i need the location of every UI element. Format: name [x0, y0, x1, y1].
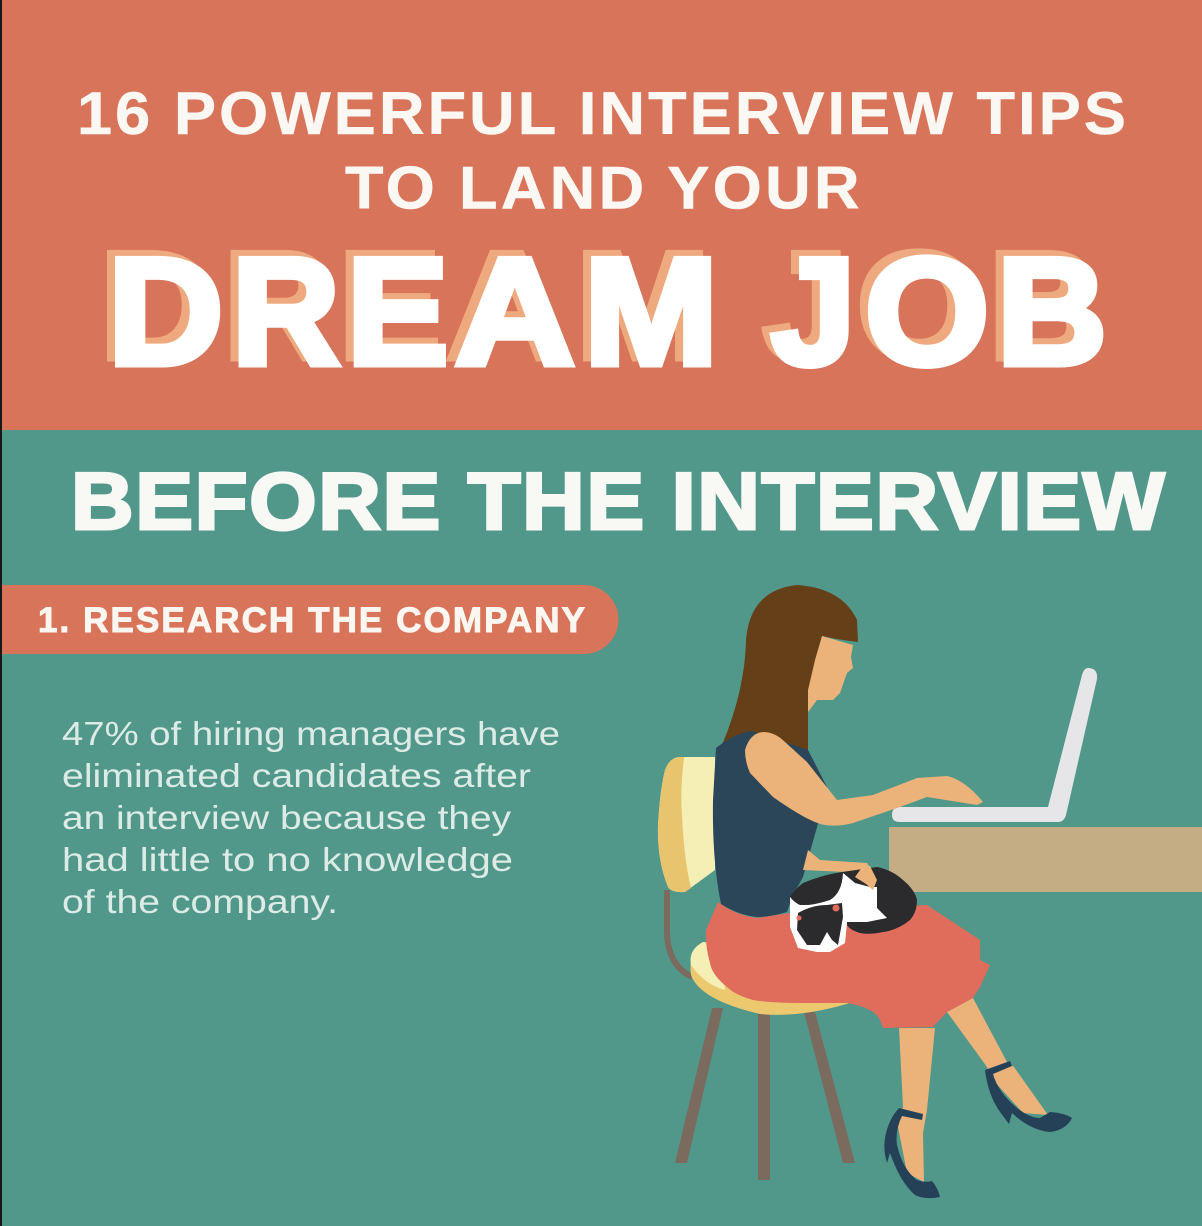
- title shadow: dream job: E: [339, 221, 440, 391]
- title shadow: dream job: R: [224, 221, 332, 390]
- tip 1 banner: [0, 585, 618, 654]
- tip 1 body text: 47% of hiring managers have: [62, 715, 560, 752]
- hair: [722, 585, 858, 765]
- title: dream job: D: [108, 227, 223, 397]
- skirt: [706, 902, 990, 1028]
- title: dream job: M: [584, 227, 718, 397]
- tip 1 body text: had little to no knowledge: [62, 841, 513, 878]
- back leg: [947, 998, 1048, 1115]
- title: dream job: [108, 226, 1107, 397]
- title shadow: dream job: A: [447, 220, 567, 391]
- title line 2: TO LAND YOUR: [345, 155, 859, 222]
- chair legs: [675, 1008, 855, 1180]
- title: dream job: J: [771, 227, 856, 397]
- cat head: [790, 897, 847, 952]
- dress top: [713, 731, 827, 917]
- left edge strip: [0, 0, 2, 1226]
- tip 1 body text: an interview because they: [62, 799, 512, 836]
- title shadow: dream job: B: [989, 221, 1099, 391]
- illustration: woman: [706, 585, 1072, 1198]
- chair back: [658, 757, 715, 892]
- title line 1: 16 POWERFUL INTERVIEW TIPS: [77, 80, 1126, 148]
- section heading: before the interview: BEFORE THE INTERVIEW: [71, 456, 1165, 546]
- panel: header: [0, 0, 1202, 430]
- front shoe: [884, 1108, 940, 1198]
- cat: [790, 866, 917, 952]
- tip 1 heading: 1. RESEARCH THE COMPANY: [38, 601, 585, 640]
- title: dream job: R: [232, 227, 340, 396]
- front leg: [897, 1028, 935, 1182]
- face: [808, 636, 853, 712]
- back shoe: [985, 1061, 1072, 1132]
- title: dream job: E: [347, 227, 448, 397]
- title: dream job: A: [455, 226, 575, 397]
- title shadow: dream job: J: [763, 221, 848, 391]
- chair stem: [667, 890, 692, 977]
- tip 1 body text: eliminated candidates after: [62, 757, 531, 794]
- laptop: [892, 668, 1097, 822]
- lower arm: [803, 850, 877, 890]
- raised arm: [745, 732, 983, 826]
- tip 1 body text: [62, 715, 560, 920]
- tip 1 body text: of the company.: [62, 883, 338, 920]
- desk: [889, 827, 1202, 892]
- illustration: chair: [658, 757, 855, 1180]
- title shadow: dream job: O: [857, 221, 981, 391]
- title shadow: dream job: D: [100, 221, 215, 391]
- hand on cat: [855, 866, 877, 890]
- cat white patch: [800, 873, 887, 922]
- title shadow: dream job: [100, 220, 1099, 391]
- title shadow: dream job: M: [576, 221, 710, 391]
- title: dream job: O: [865, 227, 989, 397]
- title: dream job: B: [997, 227, 1107, 397]
- cat body: [790, 867, 917, 934]
- chair seat: [690, 942, 850, 1015]
